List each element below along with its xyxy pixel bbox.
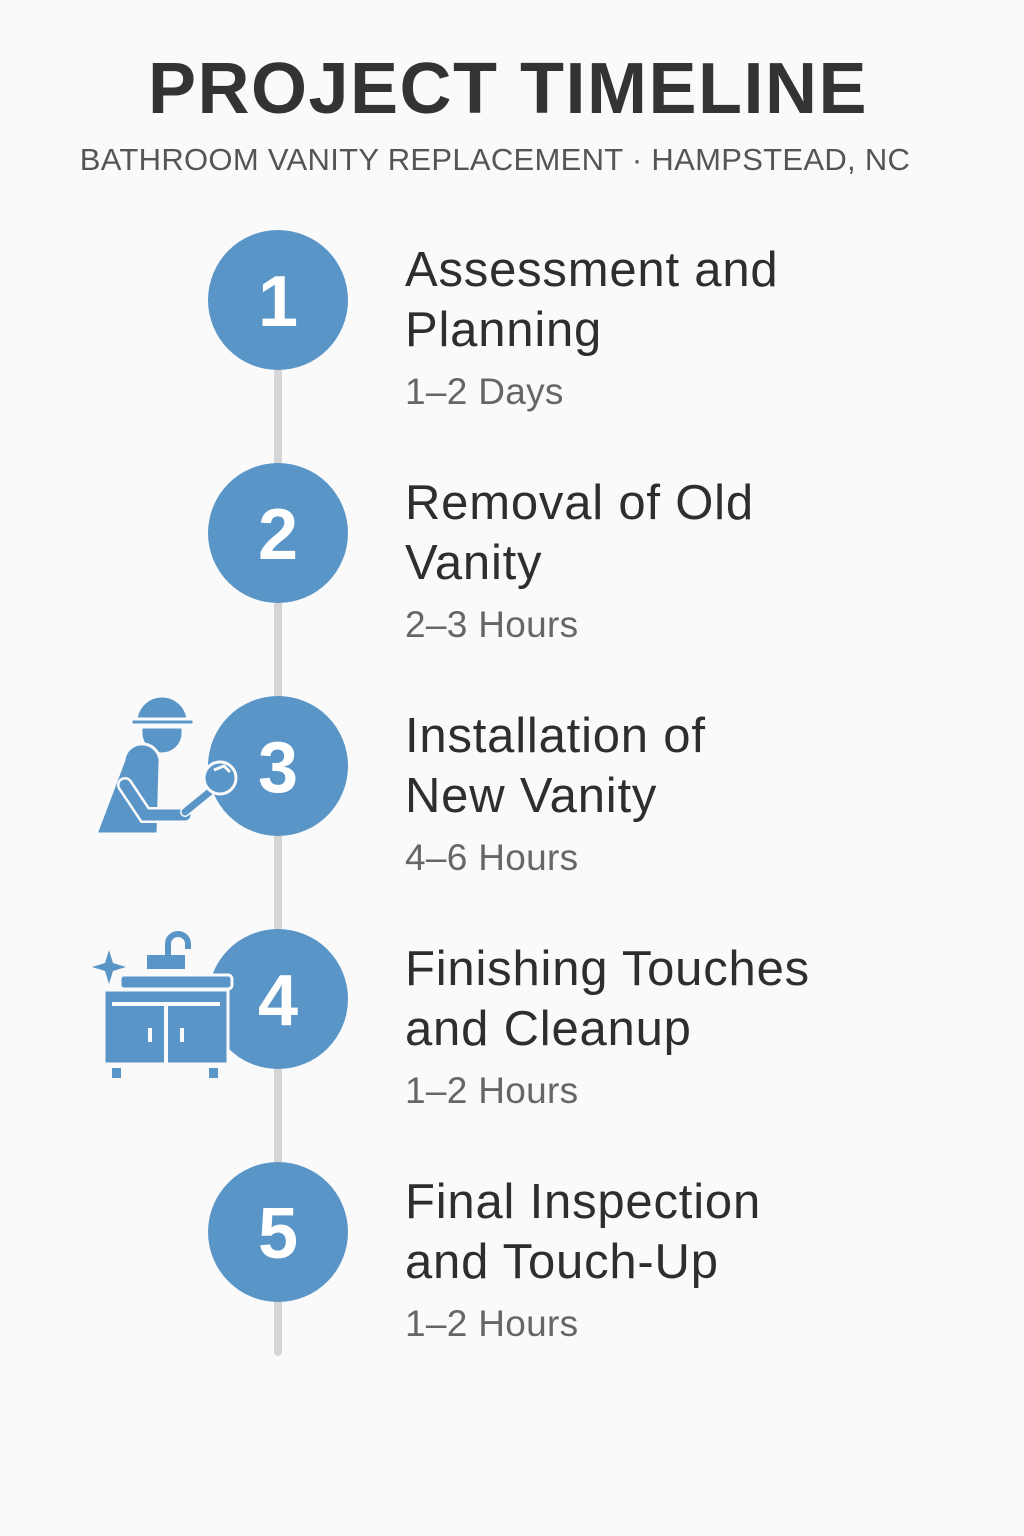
step marker 5: 5 [258, 1194, 298, 1274]
step 2 text: Removal of Old [405, 476, 754, 530]
step 4 text: Finishing Touches [405, 942, 810, 996]
title: PROJECT TIMELINE [148, 49, 868, 129]
step 3 text: New Vanity [405, 769, 657, 823]
step 1 text: Planning [405, 303, 602, 357]
icon: worker with wrench [96, 696, 236, 834]
step 5 text: Final Inspection [405, 1175, 761, 1229]
step 2 text: 2–3 Hours [405, 604, 578, 645]
step marker 2: 2 [258, 495, 298, 575]
step 3 text: 4–6 Hours [405, 837, 578, 878]
step 5 text [405, 1175, 761, 1344]
step marker 3 [208, 696, 348, 836]
step 5 text: 1–2 Hours [405, 1303, 578, 1344]
step 3 text: Installation of [405, 709, 706, 763]
step marker 2 [208, 463, 348, 603]
step marker 3: 3 [258, 728, 298, 808]
step 1 text: 1–2 Days [405, 371, 564, 412]
step 1 text [405, 243, 778, 412]
subtitle: BATHROOM VANITY REPLACEMENT · HAMPSTEAD, NC [80, 142, 910, 177]
step 3 text [405, 709, 706, 878]
step 2 text [405, 476, 754, 645]
step marker 4: 4 [258, 961, 298, 1041]
step marker 1 [208, 230, 348, 370]
step 4 text: 1–2 Hours [405, 1070, 578, 1111]
step 5 text: and Touch-Up [405, 1235, 719, 1289]
step 2 text: Vanity [405, 536, 542, 590]
step 4 text [405, 942, 810, 1111]
icon: vanity sink [92, 934, 232, 1078]
step marker 1: 1 [258, 262, 298, 342]
step 1 text: Assessment and [405, 243, 778, 297]
step marker 4 [208, 929, 348, 1069]
step 4 text: and Cleanup [405, 1002, 692, 1056]
step marker 5 [208, 1162, 348, 1302]
